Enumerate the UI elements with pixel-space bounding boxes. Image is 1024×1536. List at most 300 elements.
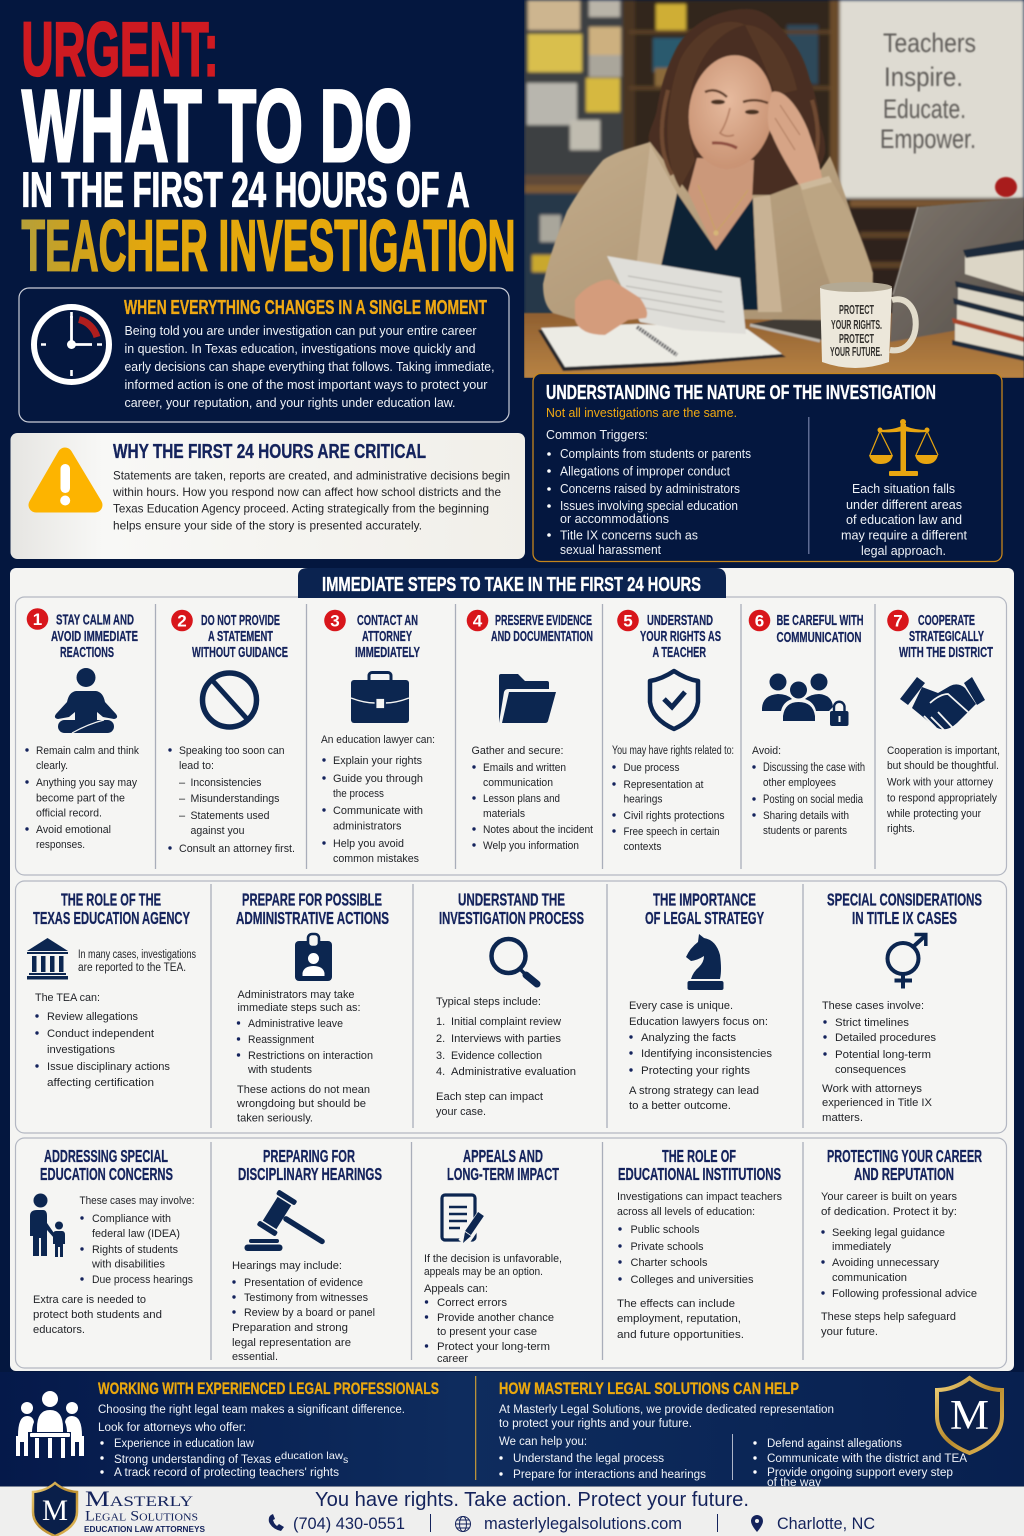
step 6: be careful with communication: 6 (755, 612, 764, 630)
text block: legal team advice (98, 1404, 405, 1479)
card: title ix cases (822, 890, 982, 1124)
whiteboard message: Inspire. (884, 62, 963, 92)
step 1: stay calm: official record. (36, 808, 102, 820)
books (965, 246, 1024, 292)
panel: why the first 24 hours are critical (10, 433, 525, 559)
card: role of educational institutions: Public schools (630, 1224, 700, 1236)
card: investigation process: 2. (436, 1033, 445, 1045)
card: investigation process: INVESTIGATION PROCESS (439, 908, 584, 928)
body text: career, your reputation, and your rights under education law. (124, 396, 456, 410)
card: protecting your career: your future. (821, 1326, 878, 1338)
step 4: preserve evidence: AND DOCUMENTATION (491, 629, 593, 645)
step 6: be careful with communication (749, 610, 865, 837)
text block: legal team advice: s (343, 1454, 348, 1466)
side note: may require a different (841, 528, 968, 542)
notebook (538, 326, 786, 371)
step 7: cooperate strategically: but should be thoughtful. (887, 760, 999, 772)
card: title ix cases: These cases involve: (822, 1000, 924, 1012)
panel: understanding the nature of the investigation (533, 374, 1002, 562)
step 3: contact an attorney: Explain your rights (333, 755, 422, 767)
icon: warning triangle (36, 455, 95, 506)
card: disciplinary hearings: legal representation are (232, 1337, 351, 1349)
coffee mug: YOUR RIGHTS. (831, 318, 882, 332)
logo: masterly legal solutions: Masterly (85, 1486, 193, 1511)
step 1: stay calm: Remain calm and think (36, 745, 139, 757)
card: legal strategy: Identifying inconsistencies (641, 1048, 773, 1060)
card: legal strategy: Analyzing the facts (641, 1032, 736, 1044)
step 2: no statement: against you (190, 825, 244, 837)
icon: id badge (295, 934, 332, 981)
card: legal strategy: A strong strategy can lead (629, 1085, 759, 1097)
heading tab (298, 568, 726, 598)
card: disciplinary hearings: essential. (232, 1351, 278, 1363)
step 3: contact an attorney: CONTACT AN (357, 613, 418, 629)
step 7: cooperate strategically: 7 (893, 612, 903, 630)
tagline: You have rights. Take action. Protect your future. (315, 1489, 749, 1511)
step 1: stay calm: Anything you say may (36, 777, 137, 789)
card: role of the texas education agency: TEXAS EDUCATION AGENCY (33, 908, 190, 928)
heading: WHY THE FIRST 24 HOURS ARE CRITICAL (113, 441, 426, 463)
card: special education concerns: Due process hearings (92, 1274, 193, 1286)
card: special education concerns (30, 1146, 194, 1336)
icon: briefcase (351, 672, 409, 723)
card: administrative actions: These actions do not mean (237, 1084, 370, 1096)
text block: legal team advice: Experience in education law (114, 1438, 255, 1450)
body text (112, 468, 510, 532)
list: common triggers: or accommodations (560, 512, 669, 526)
card: investigation process: your case. (436, 1106, 486, 1118)
body text: informed action is one of the most important ways to protect your (124, 378, 488, 392)
cardigan (543, 142, 873, 320)
icon: prohibition sign (202, 673, 256, 727)
card: administrative actions: ADMINISTRATIVE ACTIONS (236, 908, 389, 928)
card: title ix cases: Strict timelines (835, 1017, 910, 1029)
card: role of the texas education agency: Conduct independent (47, 1028, 154, 1040)
icon: document and pen (442, 1195, 482, 1243)
card: investigation process: UNDERSTAND THE (458, 890, 565, 910)
card: investigation process: 4. (436, 1066, 445, 1078)
card: role of the texas education agency: Review allegations (47, 1011, 138, 1023)
body text: in question. In Texas education, investigations move quickly and (124, 342, 476, 356)
icon: gender symbol (888, 934, 926, 988)
card: special education concerns: EDUCATION CONCERNS (40, 1164, 173, 1184)
step 7: cooperate strategically: rights. (887, 823, 915, 835)
card: administrative actions: Administrators may take (238, 989, 354, 1001)
sleeve with cuff (804, 184, 873, 284)
whiteboard message: Empower. (880, 124, 976, 154)
side note: under different areas (846, 498, 962, 512)
icon: clock (34, 307, 109, 382)
text block: legal team advice: Look for attorneys who offer: (98, 1422, 246, 1434)
body text: Being told you are under investigation can put your entire career (124, 324, 476, 338)
woman hair back (649, 9, 825, 198)
step 6: be careful with communication: COMMUNICATION (776, 630, 862, 646)
step 1: stay calm: become part of the (36, 792, 125, 804)
list: common triggers: Concerns raised by administrators (560, 482, 740, 496)
neck (688, 158, 754, 252)
step 4: preserve evidence: PRESERVE EVIDENCE (495, 613, 592, 629)
card: protecting your career: Avoiding unnecessary (832, 1257, 939, 1269)
necklace (698, 185, 748, 232)
card: special education concerns: educators. (33, 1324, 85, 1336)
text block: how we help (499, 1404, 967, 1489)
card: role of educational institutions: THE ROLE OF (662, 1146, 736, 1166)
card: special education concerns: protect both students and (33, 1309, 162, 1321)
logo: masterly legal solutions: M (42, 1494, 68, 1527)
icon: shield with check (650, 671, 698, 729)
step 3: contact an attorney: the process (333, 788, 384, 800)
contact: phone: (704) 430-0551 (293, 1514, 405, 1533)
step 4: preserve evidence: 4 (473, 612, 483, 630)
step 3: contact an attorney: common mistakes (333, 853, 419, 865)
body text (124, 324, 494, 410)
side note: legal approach. (861, 544, 946, 558)
text block: how we help: Communicate with the district and TEA (767, 1453, 967, 1465)
text block: how we help: At Masterly Legal Solutions, we provide dedicated representation (499, 1404, 834, 1416)
icon: gavel (244, 1189, 336, 1260)
step 1: stay calm: 1 (33, 610, 42, 629)
facial features (705, 90, 768, 103)
title: WHAT TO DO (22, 69, 412, 183)
card: administrative actions: taken seriously. (237, 1112, 313, 1124)
coffee mug: YOUR FUTURE. (830, 345, 882, 359)
card: title ix cases: experienced in Title IX (822, 1097, 933, 1109)
card: appeals and long-term impact: APPEALS AND (463, 1146, 543, 1166)
heading: WHEN EVERYTHING CHANGES IN A SINGLE MOMENT (124, 297, 487, 319)
text block: how we help: Defend against allegations (767, 1438, 902, 1450)
step 2: no statement: A STATEMENT (208, 629, 273, 645)
card: protecting your career: communication (832, 1272, 907, 1284)
card: special education concerns: federal law (IDEA) (92, 1228, 180, 1240)
step 4: preserve evidence: Welp you information (483, 840, 579, 852)
logo: masterly legal solutions (33, 1483, 205, 1536)
icon: meditating person (55, 668, 117, 733)
card: protecting your career (821, 1146, 982, 1338)
step 2: no statement: – (179, 793, 186, 805)
card: disciplinary hearings: Preparation and strong (232, 1322, 348, 1334)
card: legal strategy: Protecting your rights (641, 1065, 751, 1077)
step 4: preserve evidence: Emails and written (483, 762, 566, 774)
text block: how we help: We can help you: (499, 1436, 587, 1448)
panel: bottom legal help band (0, 1372, 1024, 1489)
step 7: cooperate strategically: while protecting your (886, 808, 981, 820)
whiteboard message: Teachers (883, 28, 976, 58)
step 6: be careful with communication: Discussing the case with (763, 762, 865, 774)
step 2: no statement: – (179, 810, 186, 822)
step 1: stay calm: STAY CALM AND (56, 612, 134, 628)
icon: gold shield logo: M (950, 1393, 989, 1439)
panel: when everything changes (19, 288, 509, 422)
card: role of educational institutions: Private schools (630, 1241, 704, 1253)
card: special education concerns: Compliance with (92, 1213, 171, 1225)
step 3: contact an attorney: Guide you through (333, 773, 423, 785)
step 2: no statement: Speaking too soon can (179, 745, 284, 757)
card: administrative actions (236, 890, 389, 1124)
card: administrative actions: wrongdoing but should be (236, 1098, 366, 1110)
step 5: understand your rights: A TEACHER (652, 645, 706, 661)
step 5: understand your rights: Due process (624, 762, 680, 774)
coffee mug (820, 282, 916, 368)
card: administrative actions: Reassignment (248, 1034, 314, 1046)
text block: how we help: Provide ongoing support every step (767, 1467, 953, 1479)
card: role of educational institutions: Charter schools (630, 1257, 708, 1269)
step 2: no statement: Misunderstandings (190, 793, 280, 805)
title: TEACHER INVESTIGATION (22, 206, 516, 286)
icon: government building (27, 938, 68, 980)
card: appeals and long-term impact (424, 1146, 562, 1365)
text block: legal team advice: Choosing the right legal team makes a significant difference. (98, 1404, 405, 1416)
step 4: preserve evidence: materials (483, 808, 525, 820)
title (22, 8, 516, 286)
card: appeals and long-term impact: LONG-TERM IMPACT (447, 1164, 559, 1184)
side note: Each situation falls (852, 482, 955, 496)
list: common triggers: Complaints from students or parents (560, 447, 751, 461)
card: administrative actions: PREPARE FOR POSSIBLE (242, 890, 382, 910)
step 3: contact an attorney: An education lawyer can: (321, 734, 435, 746)
card: role of educational institutions: employment, reputation, (617, 1313, 741, 1325)
step 3: contact an attorney (321, 610, 435, 865)
step 6: be careful with communication: students or parents (763, 825, 847, 837)
side note (841, 482, 968, 558)
step 6: be careful with communication: Sharing details with (763, 810, 849, 822)
card: role of the texas education agency: are reported to the TEA. (78, 962, 186, 974)
card: investigation process: 3. (436, 1050, 445, 1062)
card: disciplinary hearings: Review by a board or panel (244, 1307, 375, 1319)
step 2: no statement: Statements used (190, 810, 270, 822)
card: protecting your career: Your career is built on years (821, 1191, 957, 1203)
step 7: cooperate strategically (886, 610, 1000, 835)
card: investigation process: Initial complaint review (451, 1016, 561, 1028)
card: protecting your career: Seeking legal guidance (832, 1227, 945, 1239)
card: role of educational institutions (617, 1146, 782, 1341)
heading: working with experienced legal professionals: WORKING WITH EXPERIENCED LEGAL PROFESSIONALS (98, 1379, 439, 1398)
card: appeals and long-term impact: career (437, 1353, 468, 1365)
card: legal strategy (629, 890, 773, 1112)
step 4: preserve evidence: Gather and secure: (472, 745, 564, 757)
step 3: contact an attorney: IMMEDIATELY (355, 645, 420, 661)
card: investigation process: Administrative evaluation (451, 1066, 576, 1078)
list: common triggers: Common Triggers: (546, 428, 648, 442)
card: appeals and long-term impact: Appeals can: (424, 1283, 488, 1295)
card: disciplinary hearings: Presentation of evidence (244, 1277, 363, 1289)
card: special education concerns: These cases may involve: (80, 1195, 194, 1207)
step 2: no statement: DO NOT PROVIDE (201, 613, 280, 629)
card: special education concerns: with disabilities (91, 1258, 165, 1270)
card: title ix cases: matters. (822, 1112, 863, 1124)
card: title ix cases: IN TITLE IX CASES (852, 908, 957, 928)
hand holding paper (575, 280, 647, 335)
step 2: no statement (168, 610, 295, 855)
card: appeals and long-term impact: Provide another chance (437, 1312, 554, 1324)
text block: how we help: to protect your rights and your future. (499, 1418, 692, 1430)
icon: gold shield logo (937, 1378, 1002, 1453)
card: investigation process (436, 890, 584, 1118)
step 4: preserve evidence (467, 610, 593, 852)
step 5: understand your rights: YOUR RIGHTS AS (640, 629, 721, 645)
card: title ix cases: Detailed procedures (835, 1032, 937, 1044)
card: legal strategy: OF LEGAL STRATEGY (645, 908, 764, 928)
step 7: cooperate strategically: COOPERATE (918, 613, 975, 629)
icon: magnifying glass (492, 939, 537, 984)
side note: of education law and (846, 513, 962, 527)
card: investigation process: Each step can impact (436, 1091, 543, 1103)
card: administrative actions: with students (247, 1064, 312, 1076)
blouse (660, 193, 758, 310)
body text: Texas Education Agency proceed. Acting strategically from the beginning (113, 502, 489, 516)
card: protecting your career: immediately (832, 1241, 891, 1253)
footer bar (0, 1483, 1024, 1536)
list: common triggers: Allegations of improper conduct (560, 464, 731, 478)
step 3: contact an attorney: Communicate with (333, 805, 423, 817)
icon: people around a table (16, 1391, 84, 1458)
step 2: no statement: lead to: (179, 760, 214, 772)
card: role of educational institutions: across all levels of education: (617, 1206, 755, 1218)
text block: legal team advice: ducation law (281, 1450, 343, 1462)
face (688, 54, 772, 161)
card: role of the texas education agency: investigations (47, 1044, 116, 1056)
step 5: understand your rights: hearings (624, 794, 663, 806)
card: role of educational institutions: Colleges and universities (630, 1274, 754, 1286)
hand on temple (768, 92, 822, 186)
card: protecting your career: Following professional advice (832, 1288, 977, 1300)
card: administrative actions: Restrictions on interaction (248, 1050, 373, 1062)
text block: how we help: Understand the legal process (513, 1453, 664, 1465)
card: role of educational institutions: Investigations can impact teachers (617, 1191, 782, 1203)
card: special education concerns: ADDRESSING SPECIAL (44, 1146, 168, 1166)
step 7: cooperate strategically: Cooperation is important, (887, 745, 1000, 757)
step 3: contact an attorney: 3 (330, 612, 340, 630)
card: protecting your career: These steps help safeguard (821, 1311, 956, 1323)
logo: masterly legal solutions: EDUCATION LAW ATTORNEYS (84, 1524, 205, 1534)
step 1: stay calm: REACTIONS (60, 645, 114, 661)
step 3: contact an attorney: ATTORNEY (362, 629, 412, 645)
step 5: understand your rights: contexts (624, 841, 662, 853)
contact: location: Charlotte, NC (777, 1514, 875, 1533)
whiteboard message: Educate. (883, 94, 966, 124)
card: role of the texas education agency: THE ROLE OF THE (61, 890, 161, 910)
icon: chess knight (686, 934, 724, 990)
card: investigation process: Interviews with parties (451, 1033, 561, 1045)
card: role of educational institutions: EDUCATIONAL INSTITUTIONS (618, 1164, 781, 1184)
card: legal strategy: to a better outcome. (629, 1100, 731, 1112)
text block: how we help: of the way (767, 1477, 821, 1489)
card: appeals and long-term impact: If the decision is unfavorable, (424, 1253, 562, 1265)
card: legal strategy: Every case is unique. (629, 1000, 733, 1012)
step 2: no statement: WITHOUT GUIDANCE (192, 645, 288, 661)
step 5: understand your rights (612, 610, 734, 853)
panel: immediate steps section (10, 568, 1014, 1371)
step 2: no statement: – (179, 777, 186, 789)
card: role of educational institutions: and future opportunities. (617, 1329, 744, 1341)
card: role of the texas education agency: In many cases, investigations (78, 949, 196, 961)
step 6: be careful with communication: other employees (763, 777, 836, 789)
step 1: stay calm: responses. (36, 839, 85, 851)
logo: masterly legal solutions: Legal Solutions (85, 1508, 198, 1524)
step 4: preserve evidence: Lesson plans and (483, 793, 560, 805)
card: protecting your career: of dedication. Protect it by: (821, 1206, 957, 1218)
card: special education concerns: Rights of students (92, 1244, 178, 1256)
icon: parent and child (30, 1194, 65, 1257)
card: appeals and long-term impact: appeals may be an option. (424, 1266, 543, 1278)
title: IN THE FIRST 24 HOURS OF A (22, 164, 470, 218)
step 1: stay calm (25, 608, 139, 851)
card: disciplinary hearings: Testimony from witnesses (244, 1292, 368, 1304)
card: title ix cases: consequences (835, 1064, 906, 1076)
body text: Statements are taken, reports are created, and administrative decisions begin (113, 468, 510, 482)
photo: stressed teacher at desk (524, 0, 1024, 378)
step 7: cooperate strategically: Work with your attorney (887, 776, 993, 788)
card: administrative actions: immediate steps such as: (238, 1002, 360, 1014)
contact: website: masterlylegalsolutions.com (484, 1514, 682, 1533)
icon: handshake (900, 677, 985, 731)
step 4: preserve evidence: Notes about the incident (483, 824, 593, 836)
title: URGENT: (22, 8, 218, 92)
card: role of the texas education agency: The TEA can: (35, 992, 100, 1004)
list: common triggers: Issues involving special education (560, 499, 738, 513)
step 2: no statement: Inconsistencies (190, 777, 262, 789)
paper (607, 256, 746, 334)
step 5: understand your rights: Representation at (624, 779, 704, 791)
step 2: no statement: 2 (177, 612, 187, 630)
body text: within hours. How you respond now can affect how school districts and the (112, 485, 501, 499)
step 6: be careful with communication: Posting on social media (763, 794, 863, 806)
icon: group with padlock (762, 674, 848, 726)
card: title ix cases: Work with attorneys (822, 1083, 923, 1095)
card: investigation process: Typical steps include: (436, 996, 541, 1008)
card: appeals and long-term impact: Correct errors (437, 1297, 508, 1309)
list: common triggers: Title IX concerns such as (560, 528, 698, 542)
step 5: understand your rights: Free speech in certain (624, 826, 720, 838)
step 1: stay calm: clearly. (36, 760, 68, 772)
list: common triggers: sexual harassment (560, 543, 661, 557)
card: administrative actions: Administrative leave (248, 1018, 343, 1030)
step 2: no statement: Consult an attorney first. (179, 843, 295, 855)
body text: helps ensure your side of the story is presented accurately. (113, 518, 422, 532)
text block: legal team advice: A track record of protecting teachers' rights (114, 1467, 339, 1479)
step 6: be careful with communication: Avoid: (752, 745, 781, 757)
card: disciplinary hearings: Hearings may include: (232, 1260, 342, 1272)
card: legal strategy: Education lawyers focus on: (629, 1016, 768, 1028)
step 1: stay calm: Avoid emotional (36, 824, 111, 836)
heading: how masterly can help: HOW MASTERLY LEGAL SOLUTIONS CAN HELP (499, 1379, 799, 1398)
heading tab: IMMEDIATE STEPS TO TAKE IN THE FIRST 24 HOURS (322, 574, 701, 596)
coffee mug: PROTECT (839, 303, 874, 317)
card: appeals and long-term impact: to present your case (437, 1326, 537, 1338)
card: investigation process: Evidence collection (451, 1050, 542, 1062)
step 4: preserve evidence: communication (483, 777, 553, 789)
card: role of the texas education agency: Issue disciplinary actions (47, 1061, 170, 1073)
card: role of the texas education agency (27, 890, 196, 1089)
text block: legal team advice: Strong understanding of Texas e (114, 1454, 281, 1466)
subheading: Not all investigations are the same. (546, 406, 737, 420)
card: title ix cases: Potential long-term (835, 1049, 931, 1061)
step 5: understand your rights: UNDERSTAND (647, 613, 713, 629)
card: investigation process: 1. (436, 1016, 445, 1028)
step 7: cooperate strategically: to respond appropriately (887, 792, 997, 804)
body text: early decisions can shape everything that follows. Taking immediate, (124, 360, 494, 374)
coffee mug: PROTECT (839, 332, 874, 346)
card: disciplinary hearings: PREPARING FOR (263, 1146, 355, 1166)
card: appeals and long-term impact: Protect your long-term (437, 1341, 550, 1353)
whiteboard message (880, 28, 976, 154)
card: role of educational institutions: The effects can include (617, 1298, 735, 1310)
icon: scales of justice (869, 419, 938, 476)
text block: how we help: Prepare for interactions and hearings (513, 1469, 706, 1481)
card: protecting your career: AND REPUTATION (854, 1164, 954, 1184)
card: special education concerns: Extra care is needed to (33, 1294, 146, 1306)
card: legal strategy: THE IMPORTANCE (653, 890, 756, 910)
card: disciplinary hearings (232, 1146, 382, 1363)
